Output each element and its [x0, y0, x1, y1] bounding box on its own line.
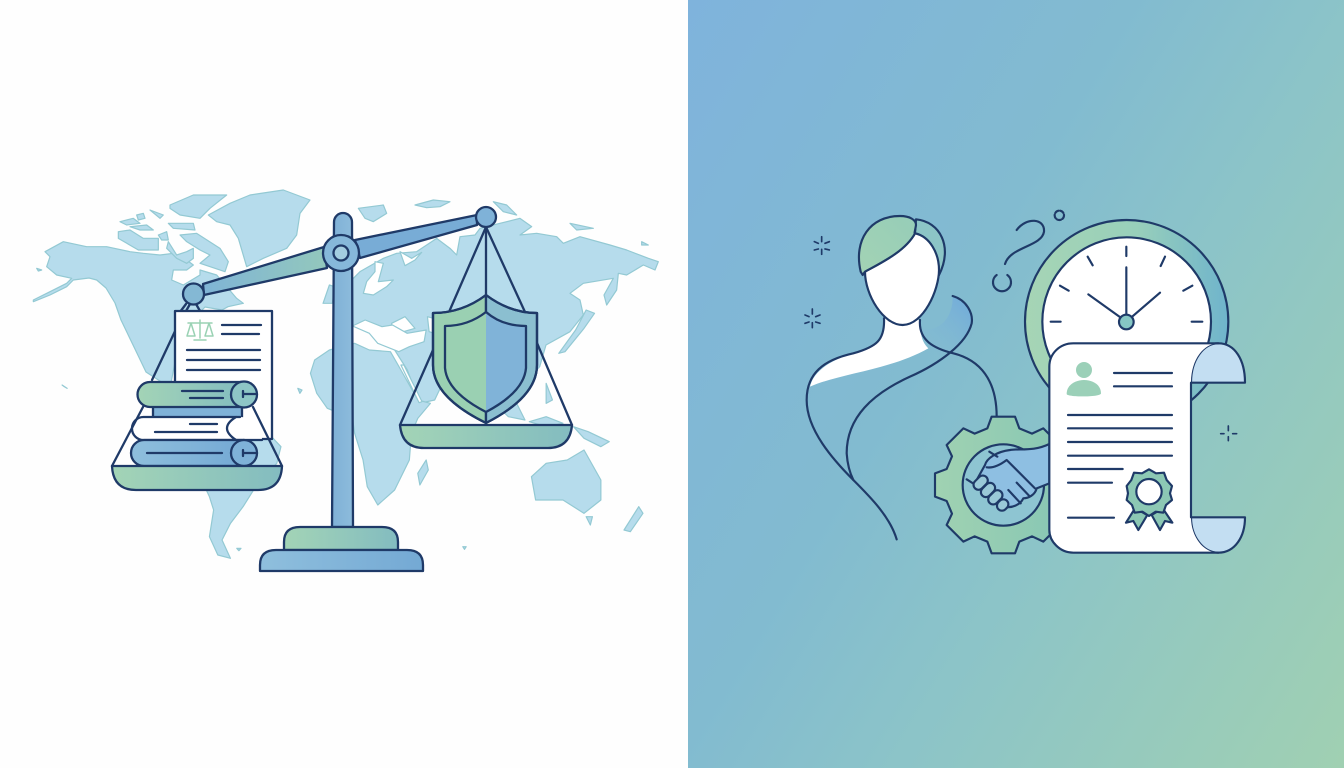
sparkles: [805, 237, 1237, 441]
right strings: [400, 227, 572, 425]
legal document: [175, 311, 272, 439]
left pan: [112, 466, 282, 490]
book stack: [112, 382, 282, 466]
world map: [33, 190, 658, 558]
panel: left white background: [0, 0, 688, 768]
gear with handshake: [935, 417, 1072, 553]
person figure: [807, 216, 997, 539]
icon: award seal: [1126, 469, 1172, 530]
scale post and base: [260, 213, 423, 571]
clock: [1025, 220, 1228, 423]
left strings: [152, 304, 200, 380]
right pan: [400, 425, 572, 448]
balance scale: [112, 207, 572, 571]
icon: user avatar: [1067, 362, 1101, 396]
question mark: [993, 211, 1064, 291]
icon: handshake: [967, 444, 1049, 513]
shield: [433, 295, 537, 423]
contract scroll: [1049, 343, 1245, 553]
scale beam: [183, 207, 496, 304]
panel: right gradient background: [688, 0, 1344, 768]
icon: small scales: [187, 320, 213, 340]
right illustration group: [805, 211, 1245, 553]
